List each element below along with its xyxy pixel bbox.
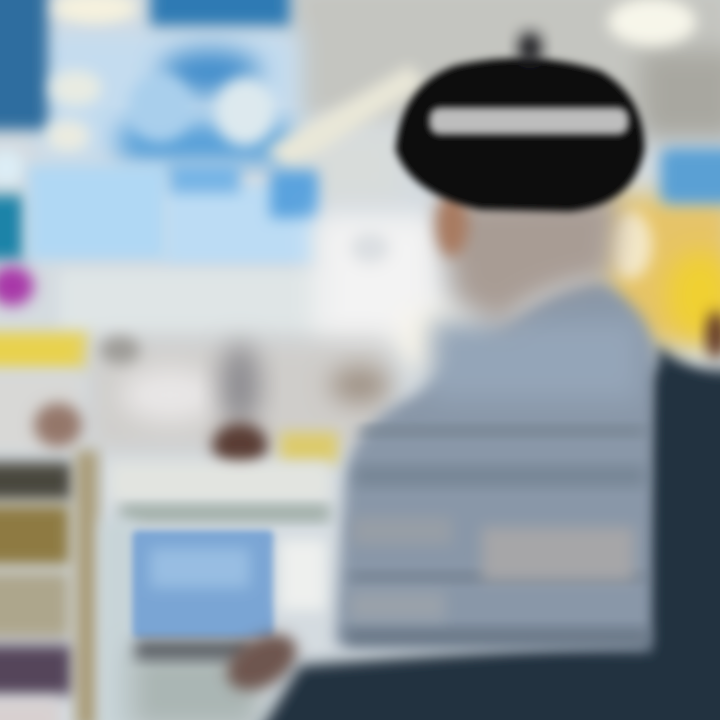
shopper: jacket <box>255 280 720 720</box>
store shelves with products <box>0 336 390 521</box>
magenta and yellow shelf labels <box>0 266 88 368</box>
wooden shelving, lower left <box>0 450 260 720</box>
bright white centre display <box>315 215 482 374</box>
ceiling lights and upper-left blue signage <box>0 0 696 186</box>
hand <box>217 622 307 702</box>
shopper: dark hair with light band <box>395 32 645 212</box>
shopper: neck <box>440 195 620 325</box>
phone or tablet held by the shopper <box>132 530 326 660</box>
right side: blue sign and yellow shelves <box>605 148 720 359</box>
blue display panels <box>0 165 330 335</box>
shopper: ear and skin tone shadow <box>436 193 468 257</box>
